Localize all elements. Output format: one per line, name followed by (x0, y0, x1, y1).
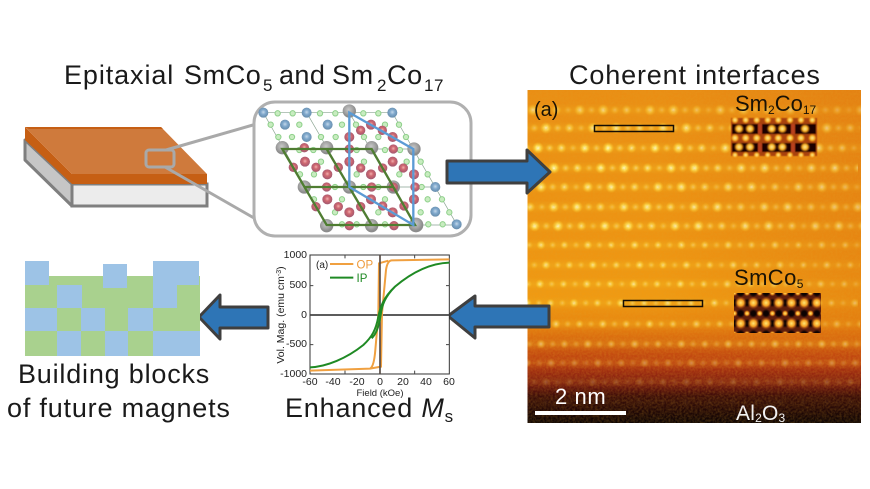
y tick labels (280, 249, 307, 380)
title: epitaxial films: 2 (377, 76, 387, 95)
Sm2Co17 label: 17 (803, 103, 816, 117)
Sm2Co17 label: Co (775, 91, 803, 116)
lattice thin lines (263, 113, 457, 225)
arrow: microscopy to magnetometry (448, 296, 549, 338)
box marking SmCo5 region (624, 300, 702, 306)
panel: STEM microscopy image (518, 90, 867, 425)
SmCo5 label: SmCo (734, 265, 797, 290)
legend labels (316, 260, 373, 285)
zoom region marker (146, 125, 254, 218)
title: coherent interfaces: Coherent interfaces (569, 60, 821, 90)
box marking Sm2Co17 region (594, 126, 674, 132)
arrow: lattice to microscopy (447, 150, 550, 193)
title: epitaxial films (64, 60, 444, 95)
panel: crystal lattice (254, 102, 471, 236)
caption: enhanced Ms: s (445, 407, 454, 426)
legend labels: IP (356, 273, 368, 285)
y axis title: ) (275, 266, 287, 270)
inset: simulated SmCo5 (734, 293, 821, 333)
y tick labels: 1000 (284, 249, 307, 261)
blue atoms (258, 108, 462, 229)
dark green SmCo5 cell (282, 149, 415, 225)
caption: building blocks of future magnets: of future magnets (7, 393, 231, 423)
image label (a): (a) (534, 99, 558, 121)
chart: hysteresis loop (275, 249, 455, 399)
title: epitaxial films: Sm (332, 60, 374, 90)
title: epitaxial films: Co (387, 60, 423, 90)
y tick labels: -1000 (280, 368, 307, 380)
x tick labels: 20 (397, 376, 409, 388)
caption: building blocks of future magnets (7, 359, 231, 423)
x tick labels: 40 (420, 376, 432, 388)
title: epitaxial films: and (279, 60, 325, 90)
atomic rows (518, 102, 867, 410)
y tick labels: 0 (301, 309, 307, 321)
icon: thin film slab (25, 125, 254, 218)
y tick labels: -500 (286, 338, 307, 350)
legend labels: OP (356, 260, 373, 272)
gray atoms (276, 104, 423, 232)
scale bar label: 2 nm (555, 384, 606, 409)
diagram: building blocks (25, 261, 200, 356)
substrate label: 2 (755, 411, 762, 425)
Sm2Co17 label: 2 (768, 103, 775, 117)
IP curve (310, 263, 449, 367)
x tick labels: -20 (349, 376, 365, 388)
x axis title: Field (kOe) (357, 388, 403, 399)
y tick labels: 500 (289, 279, 307, 291)
legend (330, 261, 353, 267)
x tick labels: 0 (377, 376, 383, 388)
y axis title: Vol. Mag. (emu cm (275, 276, 287, 364)
green small atoms (268, 111, 452, 227)
title: epitaxial films: Epitaxial (64, 60, 174, 90)
OP curve (310, 259, 449, 371)
title: epitaxial films: SmCo (184, 60, 261, 90)
x tick labels (302, 376, 455, 388)
x tick labels: -40 (325, 376, 341, 388)
SmCo5 label: 5 (797, 277, 804, 291)
title: epitaxial films: 17 (424, 76, 444, 95)
red atoms (289, 120, 420, 230)
scale bar (535, 411, 626, 415)
substrate label: 3 (778, 411, 786, 425)
blue Sm2Co17 cell (349, 113, 413, 225)
caption: building blocks of future magnets: Building blocks (18, 359, 210, 389)
Sm2Co17 label: Sm (735, 91, 768, 116)
substrate label: O (762, 402, 778, 425)
y axis title: -3 (276, 270, 283, 276)
arrow: magnetometry to building blocks (199, 295, 268, 339)
title: epitaxial films: 5 (263, 76, 273, 95)
substrate label: Al (736, 402, 755, 425)
x tick labels: 60 (443, 376, 455, 388)
caption: enhanced Ms: Enhanced M (285, 393, 445, 423)
x tick labels: -60 (302, 376, 318, 388)
inset: simulated Sm2Co17 (730, 116, 817, 158)
plot area (310, 255, 449, 374)
legend labels: (a) (316, 260, 328, 271)
